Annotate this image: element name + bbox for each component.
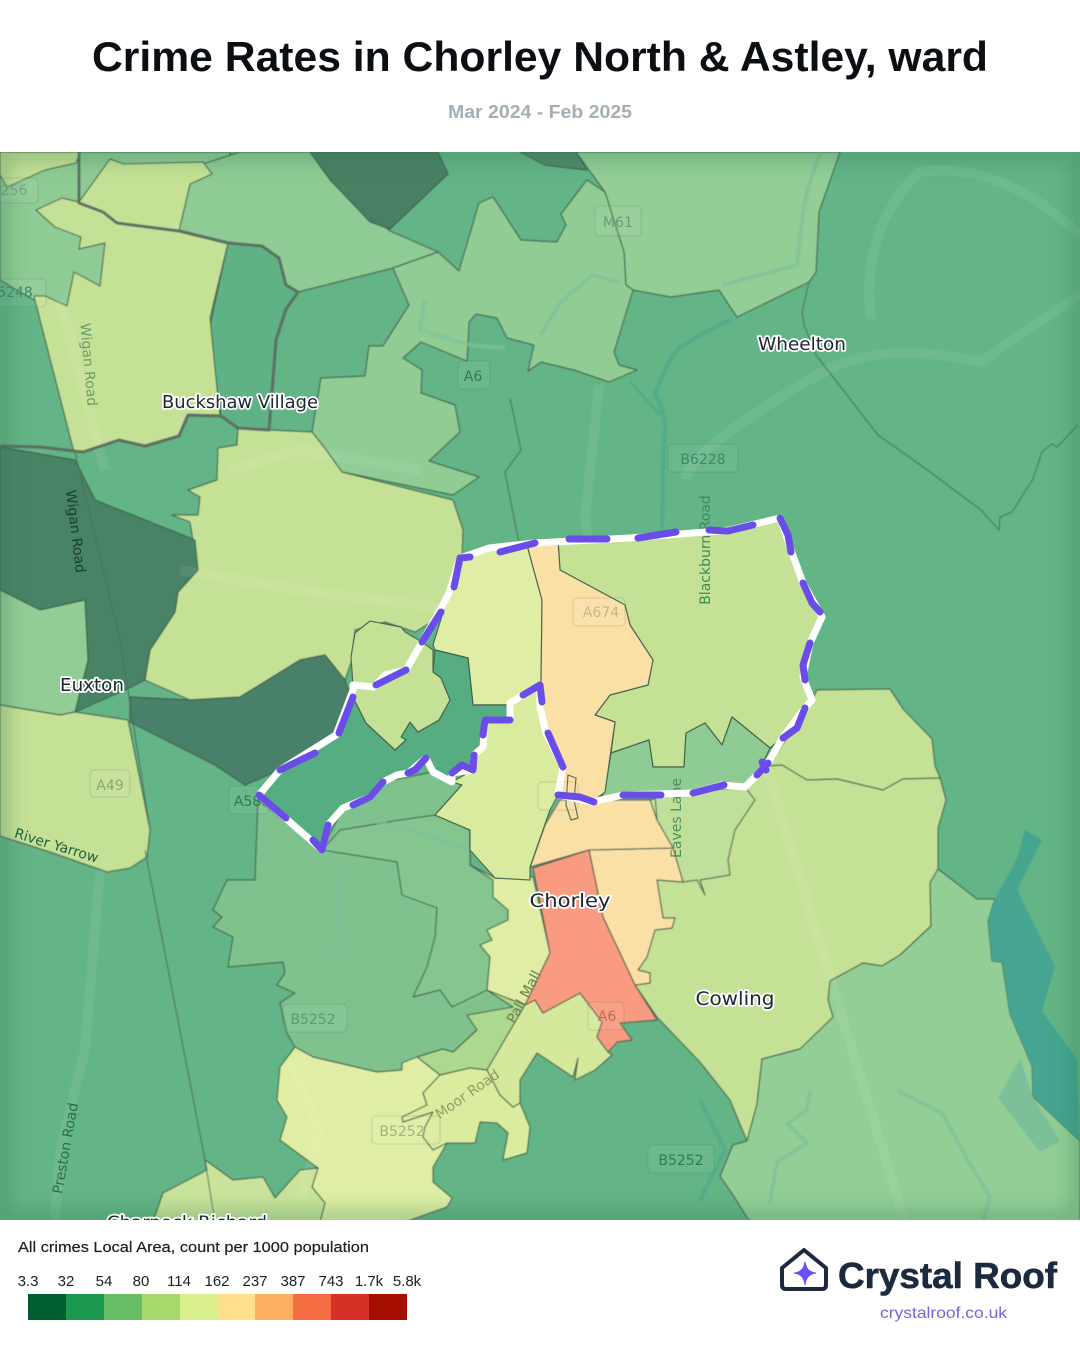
title: Crime Rates in Chorley North & Astley, ward <box>92 33 988 80</box>
road labels: River Yarrow <box>12 826 100 867</box>
river and water features <box>630 319 731 529</box>
icon: house with star <box>782 1250 826 1289</box>
place labels: Buckshaw Village <box>162 392 318 413</box>
neighbourhood polygons: surrounding wards <box>0 152 1080 1222</box>
road labels: Wigan Road <box>62 489 88 574</box>
logo: Crystal Roof <box>782 1250 1058 1322</box>
road labels: 256 <box>1 183 27 199</box>
legend scale numbers: 162 <box>204 1273 230 1290</box>
place labels: Wheelton <box>758 334 846 355</box>
edge vignette <box>0 152 1080 1220</box>
legend <box>18 1239 422 1320</box>
ward boundary: purple dashes <box>259 518 820 850</box>
road labels: B5252 <box>379 1124 425 1140</box>
road labels: Pall Mall <box>504 968 545 1026</box>
road labels: B6228 <box>680 452 726 468</box>
road labels: A6 <box>598 1009 616 1025</box>
legend scale numbers: 114 <box>167 1273 191 1290</box>
legend scale numbers: 3.3 <box>18 1273 38 1290</box>
road labels: A6 <box>464 369 482 385</box>
legend scale numbers: 387 <box>280 1273 306 1290</box>
road network lines <box>55 170 1080 1222</box>
road labels: B5252 <box>290 1012 336 1028</box>
road labels <box>0 183 726 1195</box>
road labels: Moor Road <box>433 1067 503 1123</box>
thin parish lines <box>75 282 1078 1222</box>
road labels: A674 <box>583 605 619 621</box>
road labels: Wigan Road <box>76 322 100 407</box>
legend scale numbers <box>18 1273 422 1290</box>
website: crystalroof.co.uk <box>880 1305 1008 1322</box>
place labels: Cowling <box>696 988 774 1010</box>
road labels: A49 <box>96 778 124 794</box>
legend colour ramp <box>28 1294 407 1320</box>
legend scale numbers: 5.8k <box>393 1273 422 1290</box>
brand name: Crystal Roof <box>838 1255 1058 1296</box>
legend scale numbers: 80 <box>133 1273 149 1290</box>
road labels: M61 <box>603 215 633 231</box>
place labels <box>60 334 846 1233</box>
place labels: Charnock Richard <box>107 1213 267 1233</box>
place labels: Chorley <box>530 890 610 912</box>
road labels: Eaves Lane <box>669 778 685 858</box>
ward: Chorley North & Astley pale areas <box>259 518 822 880</box>
legend title: All crimes Local Area, count per 1000 population <box>18 1239 369 1256</box>
road labels: A581 <box>234 794 270 810</box>
legend scale numbers: 54 <box>96 1273 112 1290</box>
road labels: Blackburn Road <box>698 495 714 605</box>
road labels: B5252 <box>658 1153 704 1169</box>
subtitle: date range: Mar 2024 - Feb 2025 <box>448 101 632 122</box>
legend scale numbers: 1.7k <box>355 1273 384 1290</box>
legend scale numbers: 32 <box>58 1273 74 1290</box>
ward boundary: white base line <box>259 518 822 850</box>
road shields <box>0 178 738 1173</box>
legend scale numbers: 237 <box>242 1273 268 1290</box>
place labels: Euxton <box>60 675 124 696</box>
footer background <box>0 1220 1080 1350</box>
legend scale numbers: 743 <box>318 1273 344 1290</box>
thick district boundaries <box>0 152 298 452</box>
road labels: Preston Road <box>50 1102 82 1195</box>
